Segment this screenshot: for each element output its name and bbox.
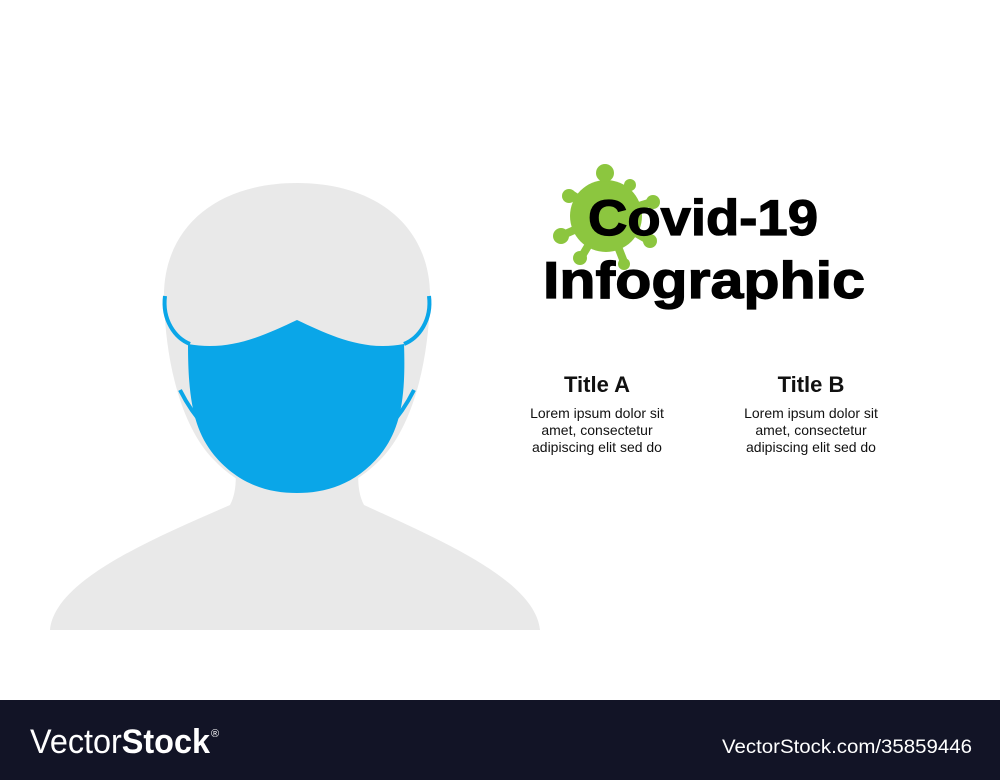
text block: Title B: amet, consectetur	[755, 422, 867, 438]
text block: Title A: amet, consectetur	[541, 422, 653, 438]
title: Covid-19	[588, 190, 818, 246]
footer bar	[0, 700, 1000, 780]
text block: Title B	[744, 372, 878, 455]
text block: Title A	[530, 372, 664, 455]
footer bar: VectorStock.com/35859446	[722, 737, 972, 758]
mask	[165, 296, 429, 493]
text block: Title B: adipiscing elit sed do	[746, 439, 876, 455]
text block: Title A: Title A	[564, 372, 630, 397]
text block: Title A: adipiscing elit sed do	[532, 439, 662, 455]
title: Infographic	[543, 252, 865, 310]
footer bar: VectorStock	[30, 723, 210, 761]
title	[543, 190, 865, 310]
icon: virus	[553, 164, 660, 270]
text block: Title A: Lorem ipsum dolor sit	[530, 405, 664, 421]
text block: Title B: Lorem ipsum dolor sit	[744, 405, 878, 421]
text block: Title B: Title B	[778, 372, 844, 397]
person silhouette	[50, 183, 540, 630]
footer bar: ®	[211, 728, 219, 740]
